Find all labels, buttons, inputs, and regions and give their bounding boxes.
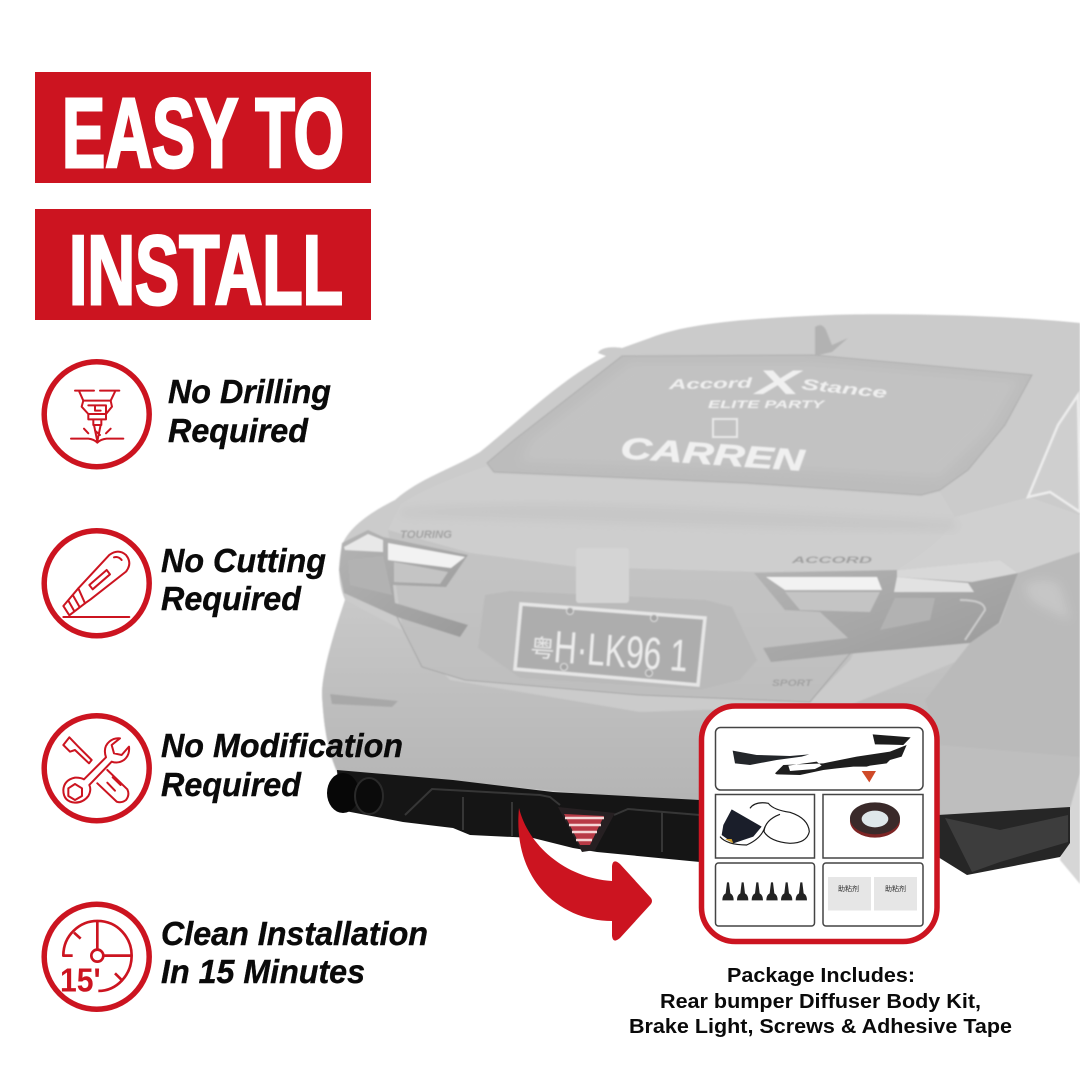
left tail lamp	[339, 530, 468, 637]
caption: package includes	[629, 965, 1012, 1038]
rear diffuser (black)	[327, 770, 1070, 875]
icon: clock 15 minutes: 15'	[60, 963, 101, 1000]
spoiler shadow crease	[400, 505, 958, 530]
sticker text on window: X	[752, 364, 804, 402]
plate recess	[478, 591, 757, 690]
badge patch	[576, 548, 629, 603]
label: no drilling: Required	[168, 412, 309, 449]
licence plate: H·LK96 1	[552, 621, 690, 681]
trunk lid	[388, 466, 955, 572]
product tile: screws	[716, 863, 814, 926]
licence plate	[515, 604, 705, 685]
side skirt facet	[945, 815, 1068, 872]
trunk panel	[388, 530, 897, 702]
lower bumper	[322, 600, 1080, 820]
side reflector	[330, 694, 398, 707]
product tile: adhesive tape	[823, 794, 923, 858]
sticker text on window: CARREN	[620, 432, 807, 478]
trunk seam line	[397, 570, 897, 702]
caption: package includes: Rear bumper Diffuser Body Kit,	[660, 991, 981, 1013]
window shade	[520, 362, 1020, 478]
rear tyre	[1060, 773, 1080, 884]
side skirt	[938, 807, 1070, 875]
product tile: adhesive promoter wipes	[823, 863, 923, 926]
icon: drill	[44, 362, 149, 467]
heading: Install	[35, 209, 371, 325]
panel: package contents	[702, 706, 937, 942]
caption: package includes: Brake Light, Screws & Adhesive Tape	[629, 1016, 1012, 1038]
label: no cutting: Required	[161, 580, 302, 617]
licence plate: 粤	[530, 635, 555, 664]
label: no cutting	[161, 542, 326, 617]
trunk badges: TOURING	[400, 529, 452, 541]
label: no drilling	[168, 373, 331, 449]
label: no modification	[161, 727, 403, 803]
trunk badges	[400, 529, 873, 688]
diffuser main body	[337, 770, 945, 862]
diffuser ribs	[405, 789, 700, 852]
sticker text on window: ELITE PARTY	[708, 399, 827, 411]
sticker text on window: Stance	[801, 376, 888, 402]
label: no cutting: No Cutting	[161, 542, 326, 579]
side window	[1028, 395, 1080, 512]
icon: cutter knife	[44, 531, 149, 636]
quarter lower section	[940, 745, 1080, 815]
upper fender	[897, 497, 1080, 573]
exhaust tips	[327, 773, 359, 813]
arrow: diffuser to package	[518, 808, 652, 941]
heading: Install: INSTALL	[69, 215, 343, 325]
caption: package includes: Package Includes:	[727, 965, 915, 987]
right rear quarter panel	[925, 552, 1080, 757]
label: no drilling: No Drilling	[168, 373, 331, 410]
sticker emblem	[713, 419, 737, 437]
product tile: adhesive promoter wipes: 助粘剂	[838, 884, 859, 893]
trunk badges: SPORT	[772, 678, 814, 688]
brake light	[558, 807, 615, 852]
quarter panel highlight	[1024, 580, 1070, 620]
roof fin antenna	[815, 325, 848, 356]
label: clean installation: In 15 Minutes	[161, 953, 365, 990]
label: no modification: No Modification	[161, 727, 403, 764]
label: clean installation	[161, 915, 428, 990]
heading: Easy To: EASY TO	[62, 78, 344, 188]
product tile: brake light wiring	[716, 794, 814, 858]
heading: Easy To	[35, 72, 371, 188]
sticker text on window: Accord	[667, 375, 753, 392]
product tile: adhesive promoter wipes: 助粘剂	[885, 884, 906, 893]
car body silhouette	[322, 314, 1080, 820]
sticker text on window	[620, 364, 888, 478]
right tail lamp	[754, 560, 1018, 662]
product tile: diffuser kit	[716, 728, 923, 790]
label: no modification: Required	[161, 766, 302, 803]
icon: clock 15 minutes	[44, 904, 149, 1009]
trunk badges: ACCORD	[790, 555, 873, 565]
car photo (greyscale rear view)	[322, 314, 1080, 884]
label: clean installation: Clean Installation	[161, 915, 428, 952]
icon: wrench and screwdriver	[44, 716, 149, 821]
rear window	[487, 355, 1032, 495]
